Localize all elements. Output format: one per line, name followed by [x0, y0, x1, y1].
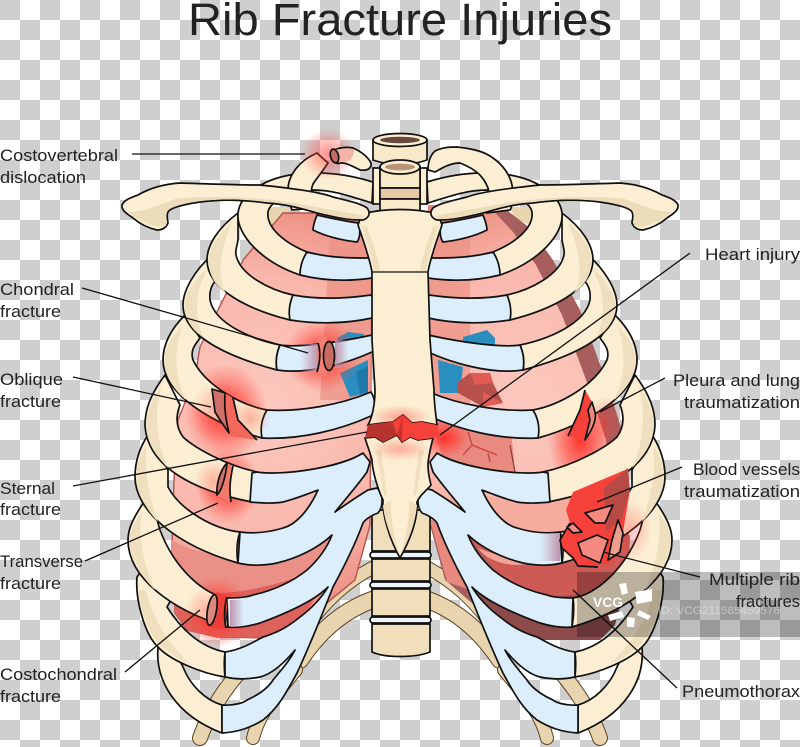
- heart and blue vessels: [438, 330, 503, 407]
- right clavicle: [431, 183, 678, 230]
- oblique fracture: [212, 389, 257, 440]
- ribs right: [418, 173, 672, 733]
- spine: posterior ribs left: [200, 207, 372, 738]
- rib one, left lateral fragment: [288, 153, 328, 210]
- ribs left: [128, 173, 382, 733]
- label: transverse fracture: fracture: [0, 574, 61, 593]
- costochondral fracture: [205, 592, 244, 630]
- label: pneumothorax: Pneumothorax: [682, 682, 800, 701]
- multiple rib fractures, right: [540, 468, 630, 568]
- label: oblique fracture: Oblique: [0, 370, 63, 389]
- label: costovertebral dislocation: dislocation: [0, 168, 86, 187]
- right lung with pneumothorax band: [428, 205, 630, 640]
- label: chondral fracture: Chondral: [0, 280, 74, 299]
- rib one, right intact: [428, 147, 513, 213]
- label: pleura and lung traumatization: traumatization: [684, 393, 800, 412]
- label: costovertebral dislocation: Costovertebral: [0, 146, 118, 165]
- label: sternal fracture: Sternal: [0, 479, 55, 498]
- label: oblique fracture: fracture: [0, 392, 61, 411]
- glow: injury tint over the bones: [185, 382, 652, 632]
- label: multiple rib fractures: Multiple rib: [709, 570, 800, 589]
- sternum upper: [358, 210, 442, 425]
- upper vertebrae: [373, 134, 427, 214]
- transverse fracture: [217, 463, 233, 502]
- watermark band: ID: VCG211585459576: [658, 605, 780, 617]
- glow: costovertebral dislocation: [300, 128, 356, 180]
- label: sternal fracture: fracture: [0, 500, 61, 519]
- leader lines: [73, 154, 700, 688]
- sternum lower glow: [370, 437, 430, 461]
- spine: posterior ribs right: [428, 207, 600, 738]
- label: costochondral fracture: fracture: [0, 687, 61, 706]
- spine vertebrae lower: [370, 510, 431, 656]
- left clavicle: [122, 183, 369, 230]
- rib one, left medial fragment with dislocated head: [329, 147, 371, 170]
- watermark band: VCG: [593, 594, 623, 610]
- label: chondral fracture: fracture: [0, 302, 61, 321]
- watermark band: [577, 572, 800, 637]
- sternal fracture gap: [365, 405, 440, 442]
- label: costochondral fracture: Costochondral: [0, 665, 117, 684]
- lower sternum with xiphoid process: [365, 435, 433, 558]
- label: heart injury: Heart injury: [705, 245, 800, 264]
- pleura and lung fracture, right: [568, 390, 595, 440]
- left lung: [172, 213, 372, 638]
- chondral fracture: [300, 336, 349, 376]
- label: pleura and lung traumatization: Pleura and lung: [673, 371, 800, 390]
- heart lower section with veins: [432, 418, 515, 472]
- label: blood vessels traumatization: Blood vessels: [693, 460, 800, 479]
- left heart vessels: [337, 332, 368, 397]
- glow: lung injury areas under the ribs: [183, 320, 612, 648]
- label: transverse fracture: Transverse: [0, 552, 83, 571]
- label: blood vessels traumatization: traumatization: [684, 482, 800, 501]
